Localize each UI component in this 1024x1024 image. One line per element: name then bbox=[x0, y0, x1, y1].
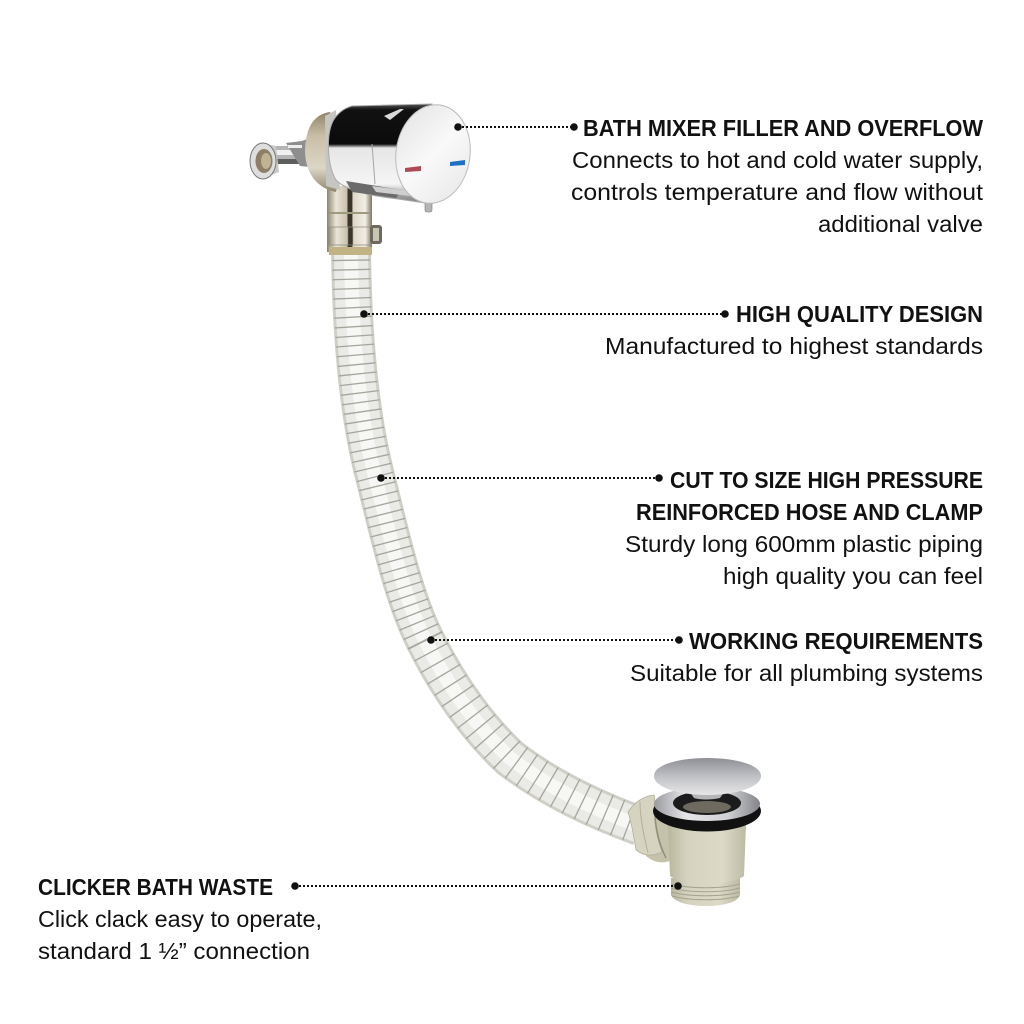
callout line: mixer bbox=[454, 123, 578, 131]
text block: working requirements bbox=[630, 628, 983, 686]
cold marker bbox=[450, 160, 465, 166]
text block: cut to size hose: high quality you can feel bbox=[723, 563, 983, 589]
text block: high quality design: HIGH QUALITY DESIGN bbox=[736, 301, 983, 327]
text block: bath mixer filler and overflow: Connects to hot and cold water supply, bbox=[572, 147, 983, 173]
text block: working requirements: WORKING REQUIREMENTS bbox=[689, 628, 983, 654]
clicker bath waste bbox=[628, 758, 761, 906]
text block: bath mixer filler and overflow: controls temperature and flow without bbox=[571, 179, 984, 205]
mushroom stem bbox=[685, 785, 729, 800]
plug opening bbox=[673, 791, 741, 815]
callout line: requirements bbox=[427, 636, 683, 644]
chrome flange bbox=[654, 787, 760, 821]
text block: bath mixer filler and overflow bbox=[571, 115, 984, 237]
dial face bbox=[389, 100, 477, 208]
text block: high quality design bbox=[605, 301, 983, 359]
nickel collar bbox=[305, 110, 345, 192]
callout line: waste bbox=[291, 882, 682, 890]
black seal bbox=[653, 790, 761, 832]
hot marker bbox=[405, 166, 421, 172]
reinforced hose bbox=[351, 250, 640, 826]
text block: high quality design: Manufactured to highest standards bbox=[605, 333, 983, 359]
text block: cut to size hose bbox=[625, 467, 983, 589]
chrome cylinder bbox=[328, 104, 432, 204]
text block: clicker bath waste: standard 1 ½” connection bbox=[38, 938, 310, 964]
text block: clicker bath waste: CLICKER BATH WASTE bbox=[38, 874, 273, 900]
text block: working requirements: Suitable for all plumbing systems bbox=[630, 660, 983, 686]
side connector bbox=[628, 795, 672, 862]
down pipe and clamp bbox=[327, 186, 382, 255]
valve stop pin bbox=[425, 201, 432, 212]
text block: bath mixer filler and overflow: additional valve bbox=[818, 211, 983, 237]
text block: bath mixer filler and overflow: BATH MIXER FILLER AND OVERFLOW bbox=[583, 115, 983, 141]
chrome cylinder slots bbox=[346, 109, 410, 198]
water inlet connector bbox=[250, 138, 312, 179]
text block: cut to size hose: REINFORCED HOSE AND CLAMP bbox=[636, 499, 983, 525]
bath mixer valve bbox=[250, 100, 477, 255]
text block: cut to size hose: Sturdy long 600mm plastic piping bbox=[625, 531, 983, 557]
text block: clicker bath waste: Click clack easy to operate, bbox=[38, 906, 322, 932]
body bbox=[668, 825, 746, 884]
text block: cut to size hose: CUT TO SIZE HIGH PRESSURE bbox=[670, 467, 983, 493]
threaded base bbox=[671, 878, 740, 906]
callout line: design bbox=[360, 310, 729, 318]
mushroom cap bbox=[654, 758, 761, 795]
callout line: hose bbox=[377, 474, 663, 482]
text block: clicker bath waste bbox=[38, 874, 322, 964]
